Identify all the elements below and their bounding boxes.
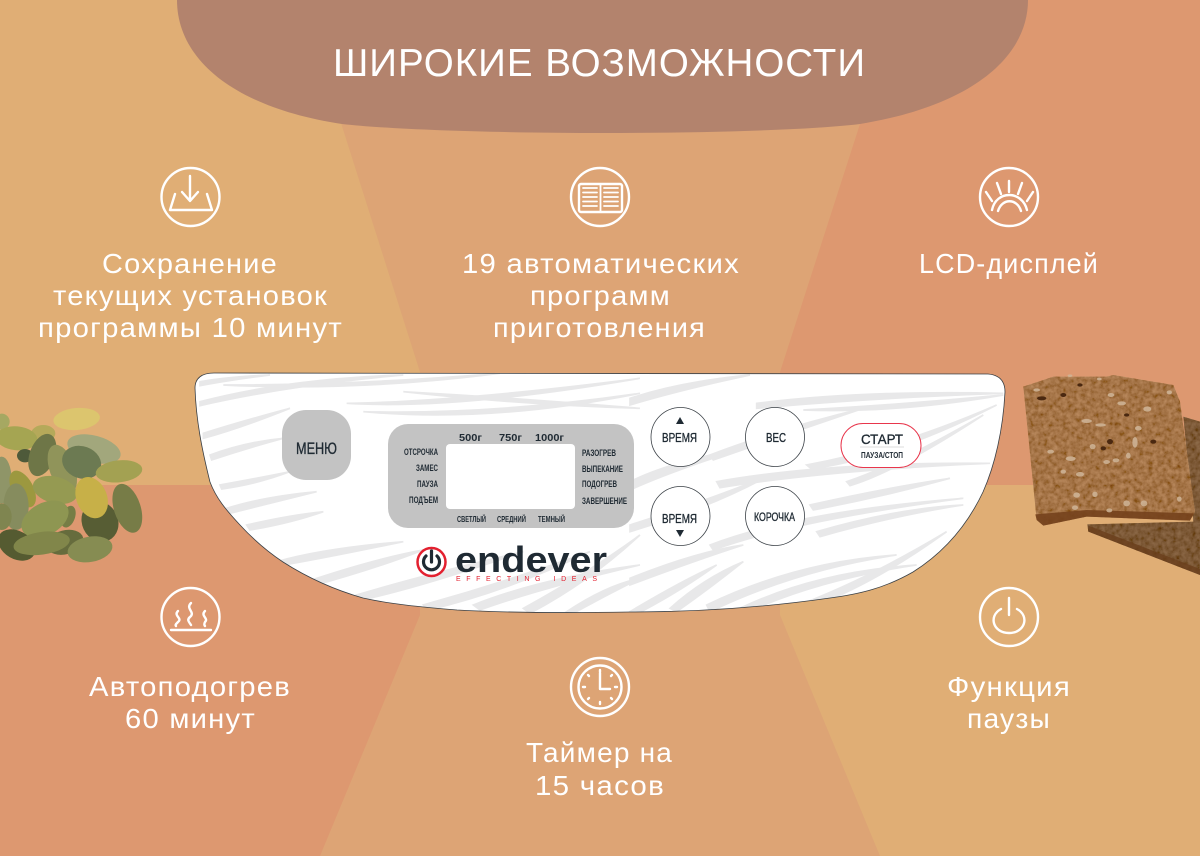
text: 19 programs (462, 248, 740, 343)
logo: Endever: EFFECTING IDEAS (456, 576, 597, 583)
control panel (195, 373, 1005, 615)
display block: СРЕДНИЙ (497, 513, 526, 524)
text: timer: 15 часов (535, 770, 665, 801)
text: 19 programs: 19 автоматических (462, 248, 740, 279)
menu button: МЕНЮ (296, 439, 337, 458)
text: auto warm: Автоподогрев (89, 671, 291, 702)
text: save settings: текущих установок (53, 280, 328, 311)
feature: timer (526, 658, 673, 801)
display block: ТЕМНЫЙ (538, 513, 565, 524)
text: save settings: Сохранение (102, 248, 278, 279)
bread back slice (1087, 417, 1200, 575)
feature: 19 programs (462, 168, 740, 343)
icon: lcd rays (980, 168, 1038, 226)
text: save settings: программы 10 минут (38, 312, 343, 343)
text: pause: паузы (967, 703, 1051, 734)
text: pause: Функция (947, 671, 1071, 702)
button: weight (746, 408, 804, 466)
feature: pause (947, 588, 1071, 734)
button: crust: КОРОЧКА (754, 512, 795, 524)
text: save settings (38, 248, 343, 343)
button: start: ПАУЗА/СТОП (861, 451, 903, 460)
text: auto warm: 60 минут (125, 703, 256, 734)
display block: РАЗОГРЕВ (582, 448, 616, 458)
image: pumpkin seeds (0, 406, 148, 567)
image: bread slices (1023, 374, 1200, 575)
display block: 750г (499, 433, 522, 444)
text: LCD display: LCD-дисплей (919, 248, 1099, 279)
button: time down: ВРЕМЯ (662, 511, 697, 526)
button: crust (746, 486, 804, 546)
button: start (841, 424, 921, 468)
display block: ПОДЪЕМ (409, 495, 438, 505)
display block (388, 424, 634, 528)
menu button (282, 410, 351, 480)
logo: Endever: endever (455, 539, 607, 580)
display block: ОТСРОЧКА (404, 447, 438, 457)
display block: 1000г (535, 433, 564, 444)
button: time up (651, 408, 710, 466)
button: weight: ВЕС (766, 430, 786, 445)
display block: СВЕТЛЫЙ (457, 513, 486, 524)
display block: 500г (459, 433, 482, 444)
text: auto warm (89, 671, 291, 734)
feature: LCD display (919, 168, 1099, 279)
text: 19 programs: приготовления (493, 312, 706, 343)
title: ШИРОКИЕ ВОЗМОЖНОСТИ (333, 42, 866, 85)
bread front slice (1023, 374, 1195, 526)
logo: Endever (418, 539, 607, 583)
icon: clock (571, 658, 629, 716)
title banner (177, 0, 1028, 133)
text: 19 programs: программ (530, 280, 671, 311)
display block: ВЫПЕКАНИЕ (582, 464, 623, 474)
display block: ПАУЗА (417, 479, 438, 489)
text: timer: Таймер на (526, 737, 673, 768)
display block: ПОДОГРЕВ (582, 479, 617, 489)
text: timer (526, 737, 673, 801)
button: time up: ВРЕМЯ (662, 430, 697, 445)
icon: power (980, 588, 1038, 646)
feature: save settings (38, 168, 343, 343)
button: start: СТАРТ (861, 431, 903, 447)
icon: open book (571, 168, 629, 226)
icon: download tray (162, 168, 220, 226)
display block: ЗАМЕС (416, 463, 438, 473)
button: time down (651, 486, 710, 546)
icon: heat (162, 588, 220, 646)
panel body (195, 373, 1005, 613)
text: pause (947, 671, 1071, 734)
display block: ЗАВЕРШЕНИЕ (582, 496, 627, 506)
feature: auto warm (89, 588, 291, 734)
